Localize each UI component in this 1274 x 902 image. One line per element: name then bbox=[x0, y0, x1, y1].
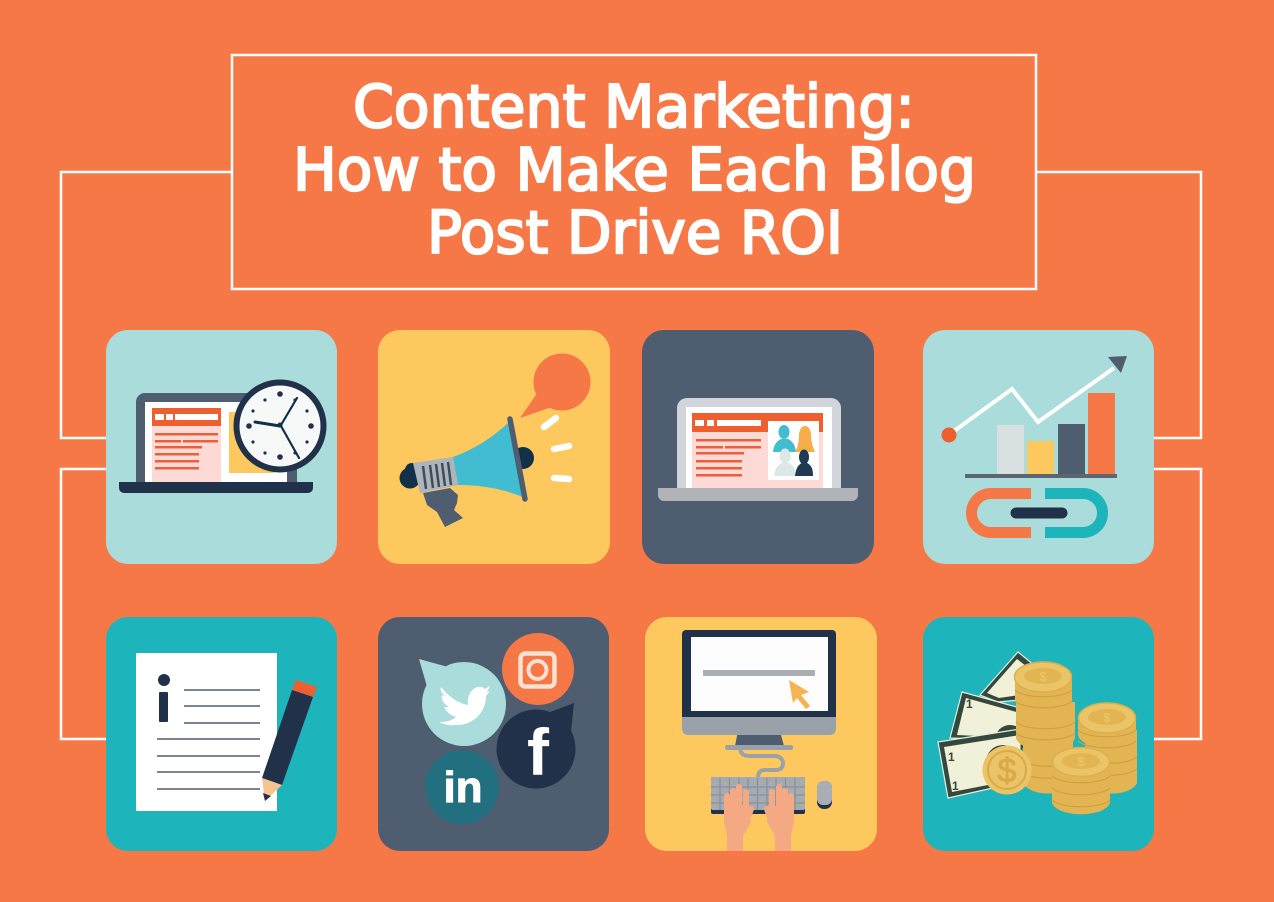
icon: linkedin: in bbox=[443, 763, 483, 812]
icon: laptop with article bbox=[119, 393, 313, 493]
icon: twitter bbox=[419, 659, 506, 746]
panel: laptop and clock bbox=[106, 330, 337, 564]
icon: banknotes bbox=[938, 652, 1034, 798]
panel: document and pencil bbox=[106, 617, 337, 851]
icon: sound lines bbox=[544, 418, 569, 479]
icon: instagram bbox=[502, 633, 574, 705]
panel: laptop with people bbox=[642, 330, 874, 564]
title bbox=[293, 72, 976, 267]
panel: social media bbox=[378, 617, 609, 851]
title: Content Marketing: bbox=[353, 72, 915, 141]
icon: coin stack right bbox=[1078, 703, 1137, 794]
icon: coin stack center bbox=[1014, 662, 1075, 794]
icon: single coin bbox=[982, 746, 1032, 794]
icon: document bbox=[136, 653, 277, 811]
icon: keyboard bbox=[711, 777, 805, 814]
icon: hands bbox=[724, 787, 794, 851]
icon: coin stack front bbox=[1052, 748, 1110, 814]
icon: megaphone bbox=[400, 419, 534, 527]
panel: growth chart and link bbox=[923, 330, 1154, 564]
title box bbox=[232, 55, 1036, 289]
icon: cable bbox=[740, 750, 783, 778]
icon: banknotes: 1 bbox=[952, 779, 959, 793]
icon: coin stack center: $ bbox=[1039, 669, 1047, 684]
panel: desktop computer bbox=[645, 617, 877, 851]
panel: money and coins bbox=[923, 617, 1154, 851]
icon: pencil bbox=[262, 680, 317, 801]
icon: mouse bbox=[817, 781, 832, 809]
panel: megaphone bbox=[378, 330, 610, 564]
icon: facebook bbox=[496, 703, 576, 789]
icon: linkedin bbox=[425, 750, 499, 824]
icon: monitor bbox=[682, 630, 836, 750]
icon: clock bbox=[236, 382, 324, 470]
trend arrow bbox=[942, 356, 1127, 442]
title: Post Drive ROI bbox=[427, 198, 843, 267]
icon: speech bubble bbox=[520, 354, 590, 418]
bar chart bbox=[965, 393, 1117, 478]
icon: facebook: f bbox=[527, 715, 550, 789]
connector lines bbox=[61, 172, 1201, 739]
icon: banknotes: 1 bbox=[948, 750, 955, 764]
icon: coin stack front: $ bbox=[1077, 754, 1085, 769]
icon: coin stack right: $ bbox=[1103, 710, 1111, 725]
icon: people bbox=[773, 425, 815, 476]
icon: single coin: $ bbox=[998, 752, 1017, 790]
title: How to Make Each Blog bbox=[293, 135, 976, 204]
icon: chain link bbox=[972, 494, 1102, 532]
icon: laptop bbox=[658, 398, 858, 501]
icon: banknotes: 1 bbox=[966, 697, 973, 711]
